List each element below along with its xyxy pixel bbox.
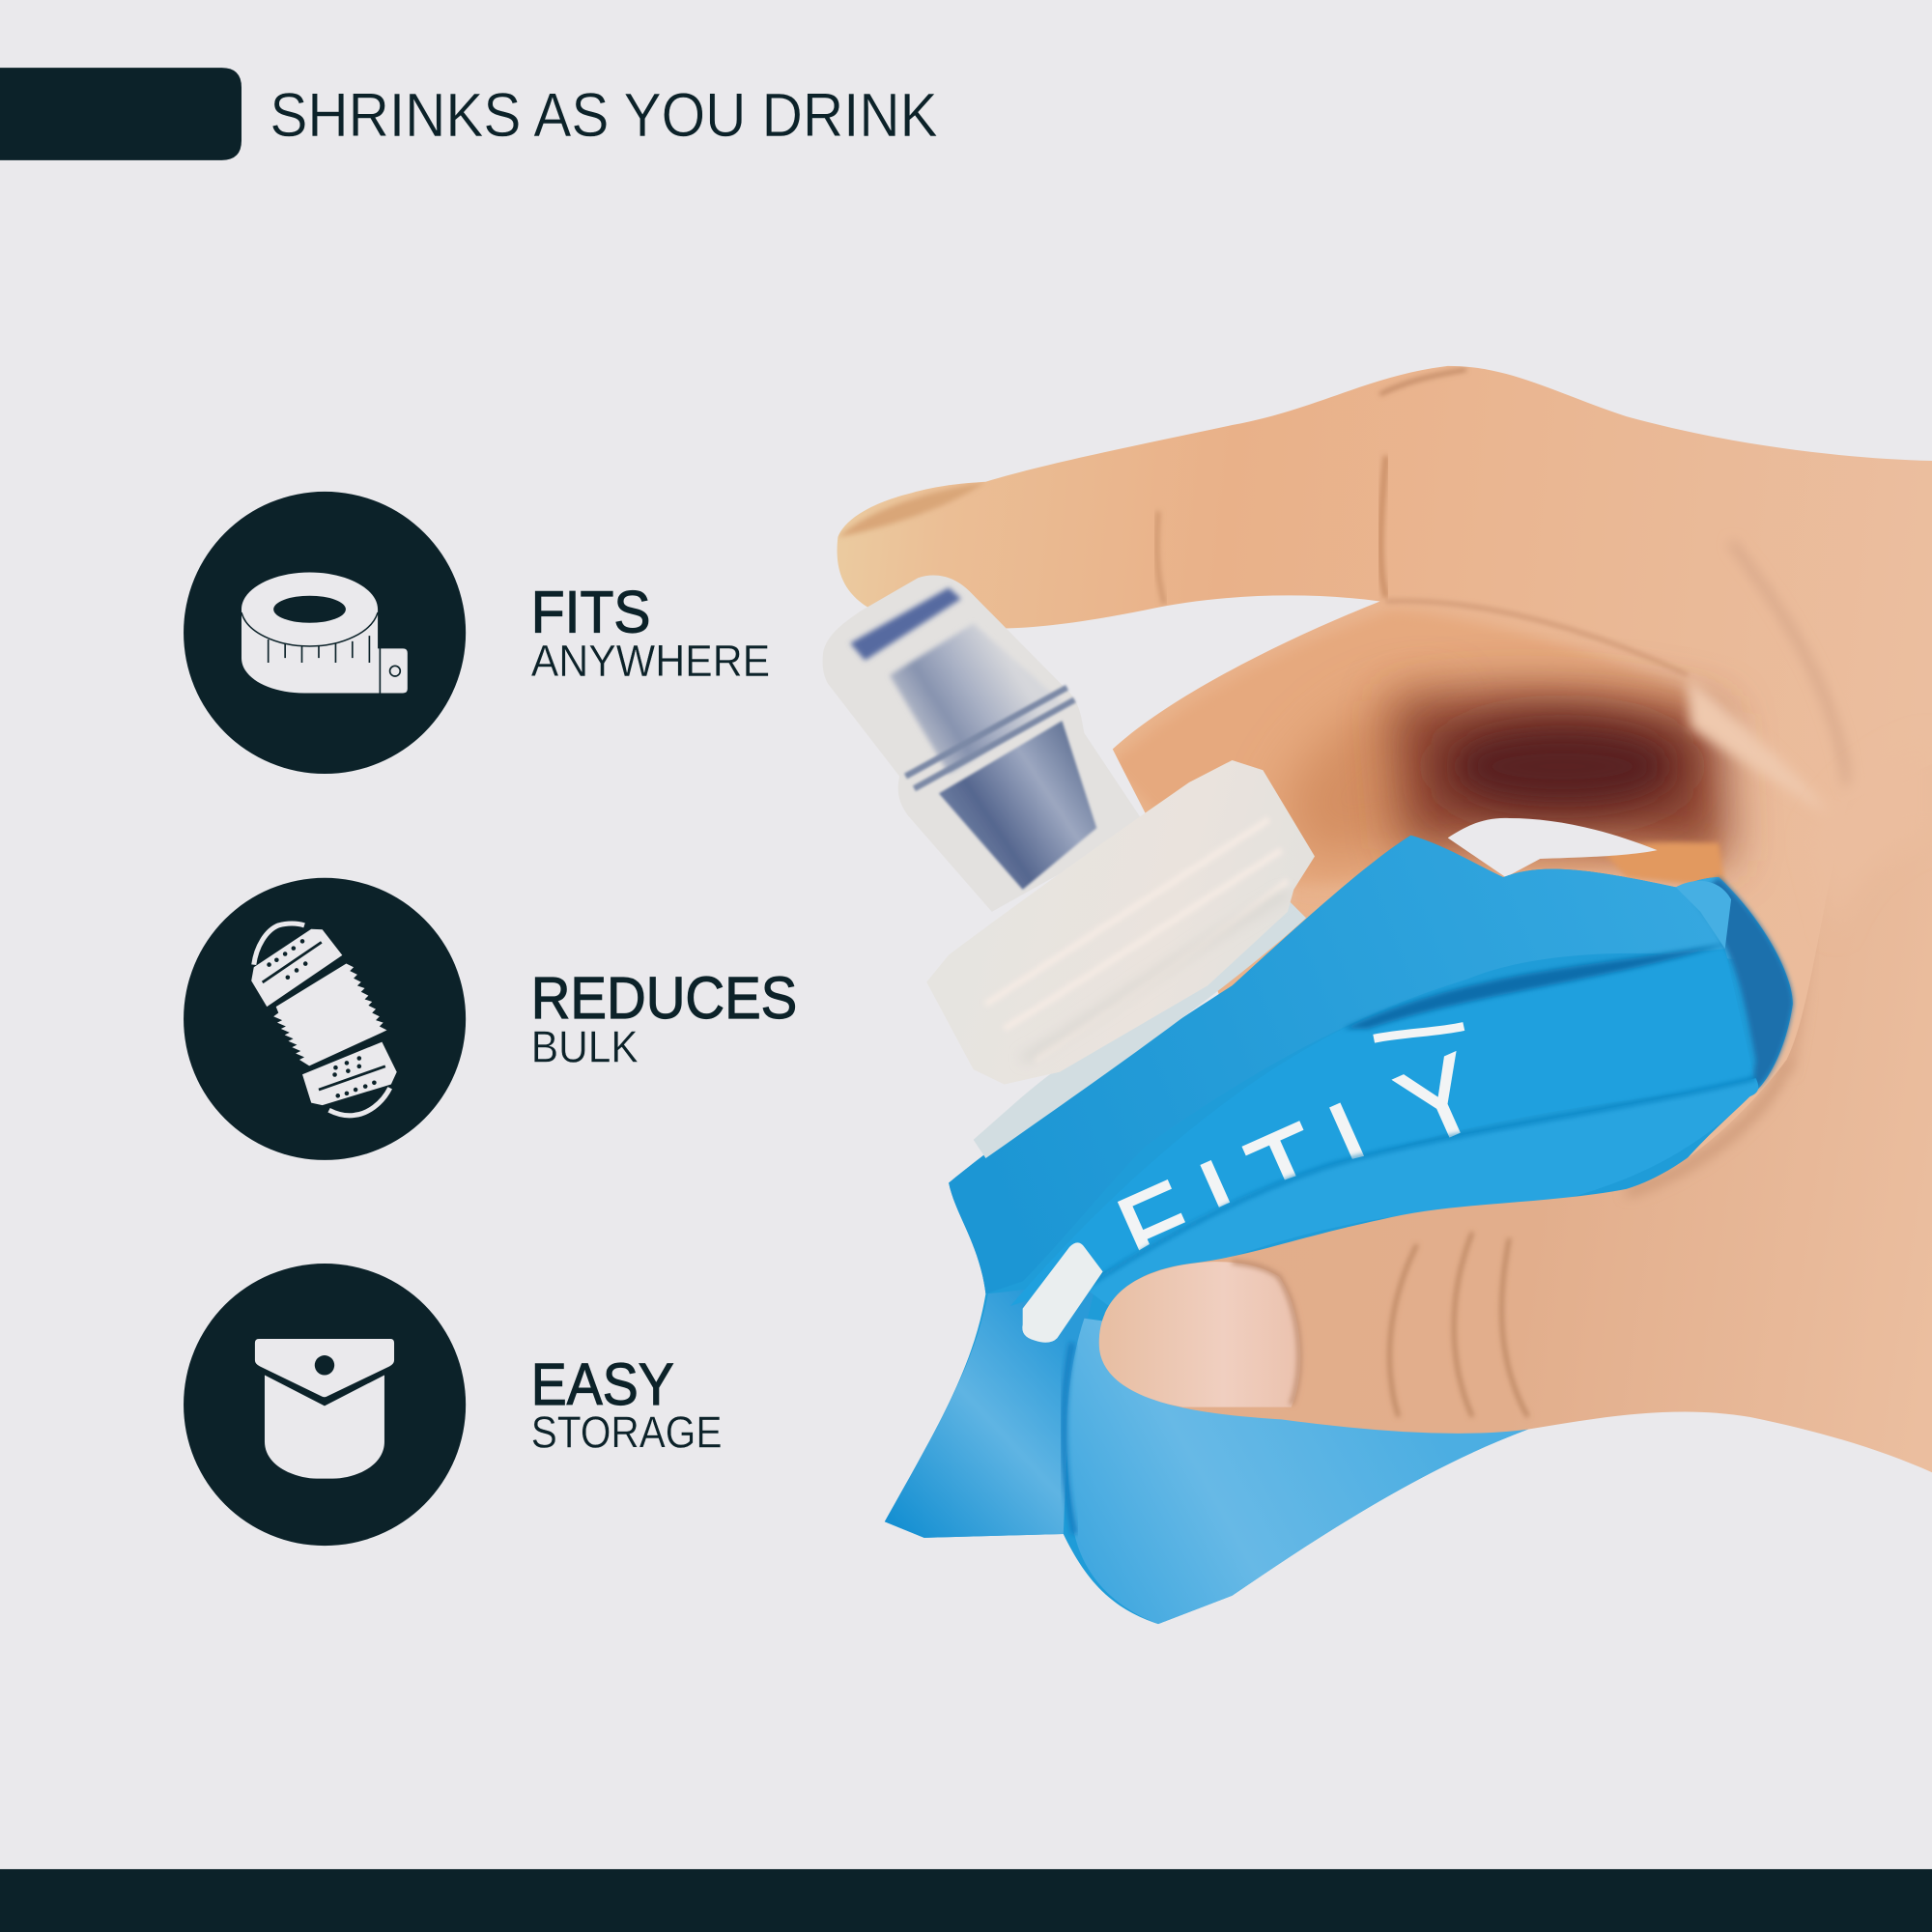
palm blend over seam xyxy=(1811,739,1932,936)
collar neck xyxy=(974,899,1306,1158)
icon: measuring tape xyxy=(184,492,466,774)
subheading: storage: STORAGE xyxy=(531,1407,722,1458)
heading: easy: EASY xyxy=(531,1351,674,1417)
subheading: bulk: BULK xyxy=(531,1021,639,1071)
bag: label band xyxy=(1010,949,1756,1306)
collar xyxy=(926,760,1315,1084)
flask bag xyxy=(885,836,1793,1624)
subheading: anywhere: ANYWHERE xyxy=(531,636,770,686)
footer bar xyxy=(0,1869,1932,1932)
hand: index and middle fingers xyxy=(838,366,1932,1233)
feature: easy storage xyxy=(184,1264,722,1546)
product photo: hand squeezing soft flask xyxy=(823,366,1932,1624)
logo text on bag: FITLY xyxy=(1101,1030,1497,1295)
title: SHRINKS AS YOU DRINK xyxy=(270,80,938,150)
icon: pocket xyxy=(184,1264,466,1546)
header tab xyxy=(0,68,242,160)
hand: thumb and palm xyxy=(1099,947,1932,1472)
bag: left wing xyxy=(885,1282,1096,1538)
icon: compression roll xyxy=(184,878,466,1160)
nozzle inner blue xyxy=(850,587,961,661)
fold shadows xyxy=(1343,943,1731,1029)
bag: upper band xyxy=(949,836,1754,1293)
heading: fits: FITS xyxy=(531,579,650,644)
nozzle xyxy=(823,576,1146,912)
bag: lower band over logo xyxy=(1084,1078,1758,1306)
flask spout and collar xyxy=(823,576,1315,1158)
logo bar xyxy=(1022,1242,1103,1343)
feature: reduces bulk xyxy=(184,878,797,1160)
thumbnail xyxy=(1091,1262,1300,1407)
heading: reduces: REDUCES xyxy=(531,965,797,1031)
bag: main body xyxy=(885,836,1793,1624)
bag: lower lobe xyxy=(1066,1319,1528,1624)
background gap between fingers xyxy=(1448,818,1658,877)
feature: fits anywhere xyxy=(184,492,770,774)
